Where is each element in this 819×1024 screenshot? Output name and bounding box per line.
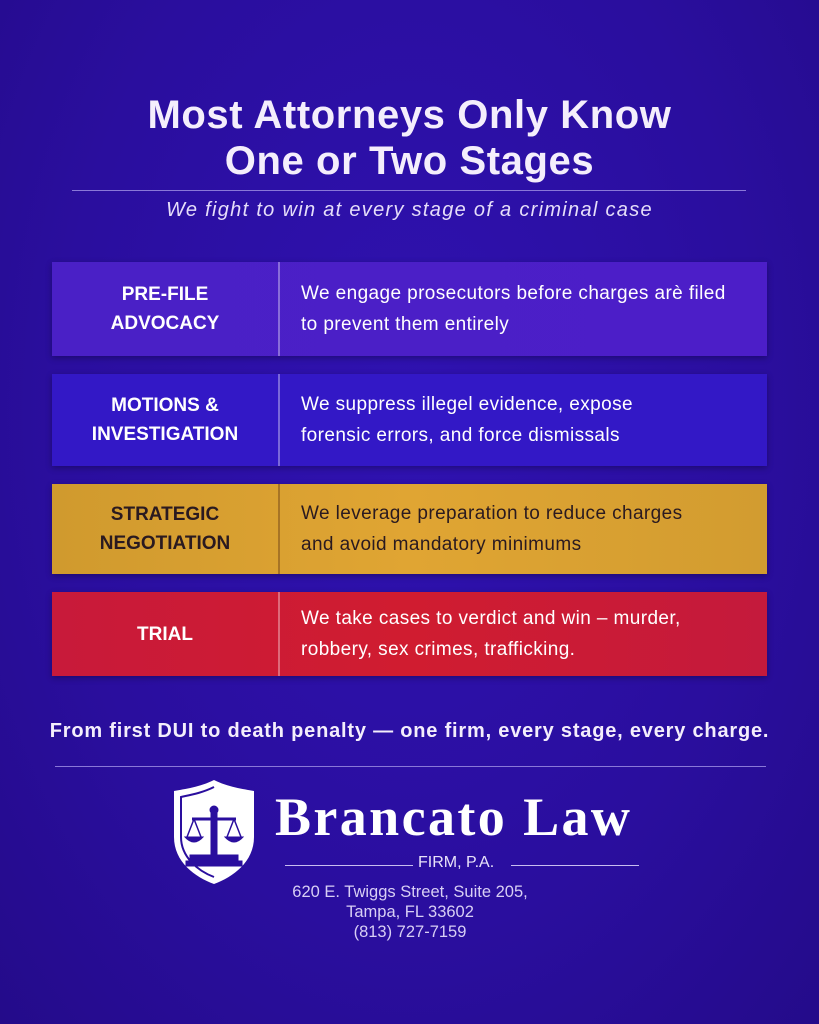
row: strategic negotiation: STRATEGIC	[111, 504, 219, 525]
row: trial: TRIAL	[137, 624, 193, 644]
row: trial: We take cases to verdict and win – murder,	[301, 608, 681, 629]
row: pre-file advocacy: We engage prosecutors before charges arè filed	[301, 283, 726, 304]
title	[147, 93, 672, 183]
row: motions & investigation: MOTIONS &	[111, 395, 219, 416]
title: One or Two Stages	[225, 139, 594, 183]
address	[292, 883, 528, 941]
icon: shield logo	[174, 780, 254, 884]
row: strategic negotiation: We leverage preparation to reduce charges	[301, 503, 682, 524]
row: motions & investigation: forensic errors, and force dismissals	[301, 425, 620, 446]
row: trial: robbery, sex crimes, trafficking.	[301, 639, 575, 660]
row: strategic negotiation: and avoid mandatory minimums	[301, 534, 581, 555]
row: strategic negotiation	[52, 484, 767, 574]
address: 620 E. Twiggs Street, Suite 205,	[292, 883, 528, 901]
firm subtitle: FIRM, P.A.	[418, 854, 494, 871]
row: trial	[52, 592, 767, 676]
address: (813) 727-7159	[354, 923, 466, 941]
footer tagline: From first DUI to death penalty — one firm, every stage, every charge.	[50, 720, 769, 742]
address: Tampa, FL 33602	[346, 903, 474, 921]
row: pre-file advocacy: PRE-FILE	[122, 284, 208, 305]
title: Most Attorneys Only Know	[147, 93, 672, 137]
row: pre-file advocacy: to prevent them entirely	[301, 314, 509, 335]
row: pre-file advocacy	[52, 262, 767, 356]
row: pre-file advocacy: ADVOCACY	[111, 313, 219, 334]
subtitle: We fight to win at every stage of a criminal case	[166, 199, 653, 221]
brand name: Brancato Law	[275, 787, 632, 847]
row: motions & investigation: We suppress illegel evidence, expose	[301, 394, 633, 415]
row: motions & investigation	[52, 374, 767, 466]
row: motions & investigation: INVESTIGATION	[92, 424, 238, 445]
row: strategic negotiation: NEGOTIATION	[100, 533, 230, 554]
